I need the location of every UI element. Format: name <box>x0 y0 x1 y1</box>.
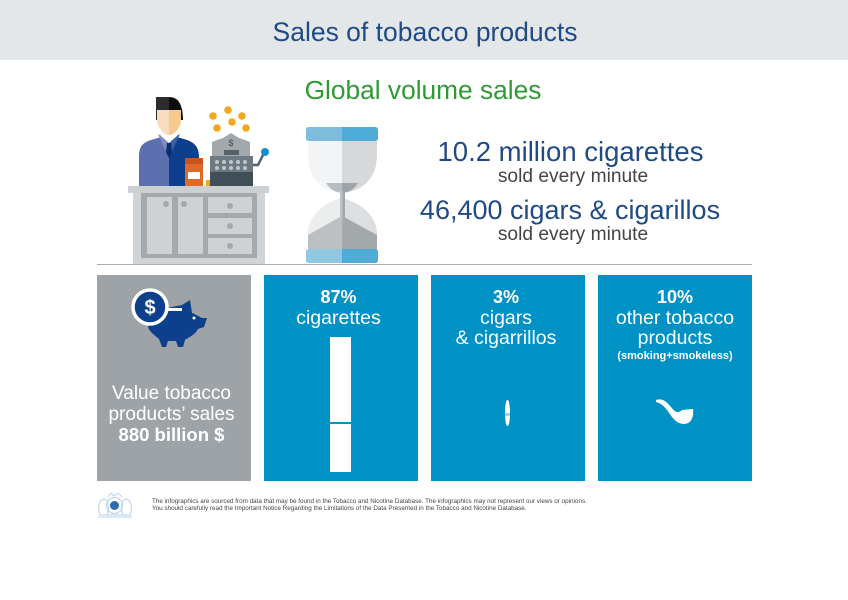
panel text: 87%: 87% <box>320 287 357 307</box>
footer disclaimer: The infographics are sourced from data that may be found in the Tobacco and Nicotine Database. The infographics may not represent our views or opinions. <box>152 498 587 505</box>
panel text: value: 880 billion $ <box>119 424 224 445</box>
panel text: 87% <box>296 287 381 328</box>
icon: shopkeeper at counter with cash register <box>128 97 269 264</box>
footer disclaimer: You should carefully read the Important Notice Regarding the Limitations of the Data Presented in the Tobacco and Nicotine Database. <box>152 505 527 512</box>
footer logo <box>98 492 132 518</box>
icon: piggy bank with dollar coin: $ <box>144 297 156 319</box>
subtitle: Global volume sales <box>305 75 541 105</box>
panel text: 3%: & cigarrillos <box>456 327 556 349</box>
icon: cigarette <box>330 337 351 472</box>
panel text: 87%: cigarettes <box>296 306 381 328</box>
icon: cigar <box>505 400 510 426</box>
panel text: 3%: 3% <box>493 287 519 307</box>
icon: piggy bank with dollar coin <box>131 288 207 347</box>
icon: pipe <box>656 399 694 424</box>
header band <box>0 0 848 60</box>
stat: cigarettes per minute: 10.2 million cigarettes <box>438 136 703 167</box>
panel text: 10%: other tobacco <box>616 306 734 328</box>
panel text: value <box>108 383 235 445</box>
panel text: value: products’ sales <box>108 404 235 424</box>
stat: cigarettes per minute: sold every minute <box>498 166 648 187</box>
panel text: value: Value tobacco <box>112 383 231 404</box>
footer disclaimer <box>152 498 587 512</box>
stat: cigars per minute <box>420 195 720 245</box>
panel text: 3% <box>456 287 556 349</box>
stat: cigars per minute: sold every minute <box>498 224 648 245</box>
panel text: 10%: 10% <box>657 287 693 307</box>
panel: value of sales <box>97 275 251 481</box>
icon: shopkeeper at counter with cash register: $ <box>228 138 234 148</box>
panel: cigarettes 87% <box>264 275 418 481</box>
title: Sales of tobacco products <box>273 17 577 47</box>
panel text: 10% <box>616 287 734 362</box>
panel text: 3%: cigars <box>480 306 532 328</box>
panel text: 10%: (smoking+smokeless) <box>617 350 733 362</box>
panel text: 10%: products <box>638 327 712 349</box>
icon: hourglass <box>306 127 378 263</box>
panel: cigars 3% <box>431 275 585 481</box>
panel: other 10% <box>598 275 752 481</box>
stat: cigars per minute: 46,400 cigars & cigarillos <box>420 195 720 225</box>
stat: cigarettes per minute <box>438 136 703 187</box>
